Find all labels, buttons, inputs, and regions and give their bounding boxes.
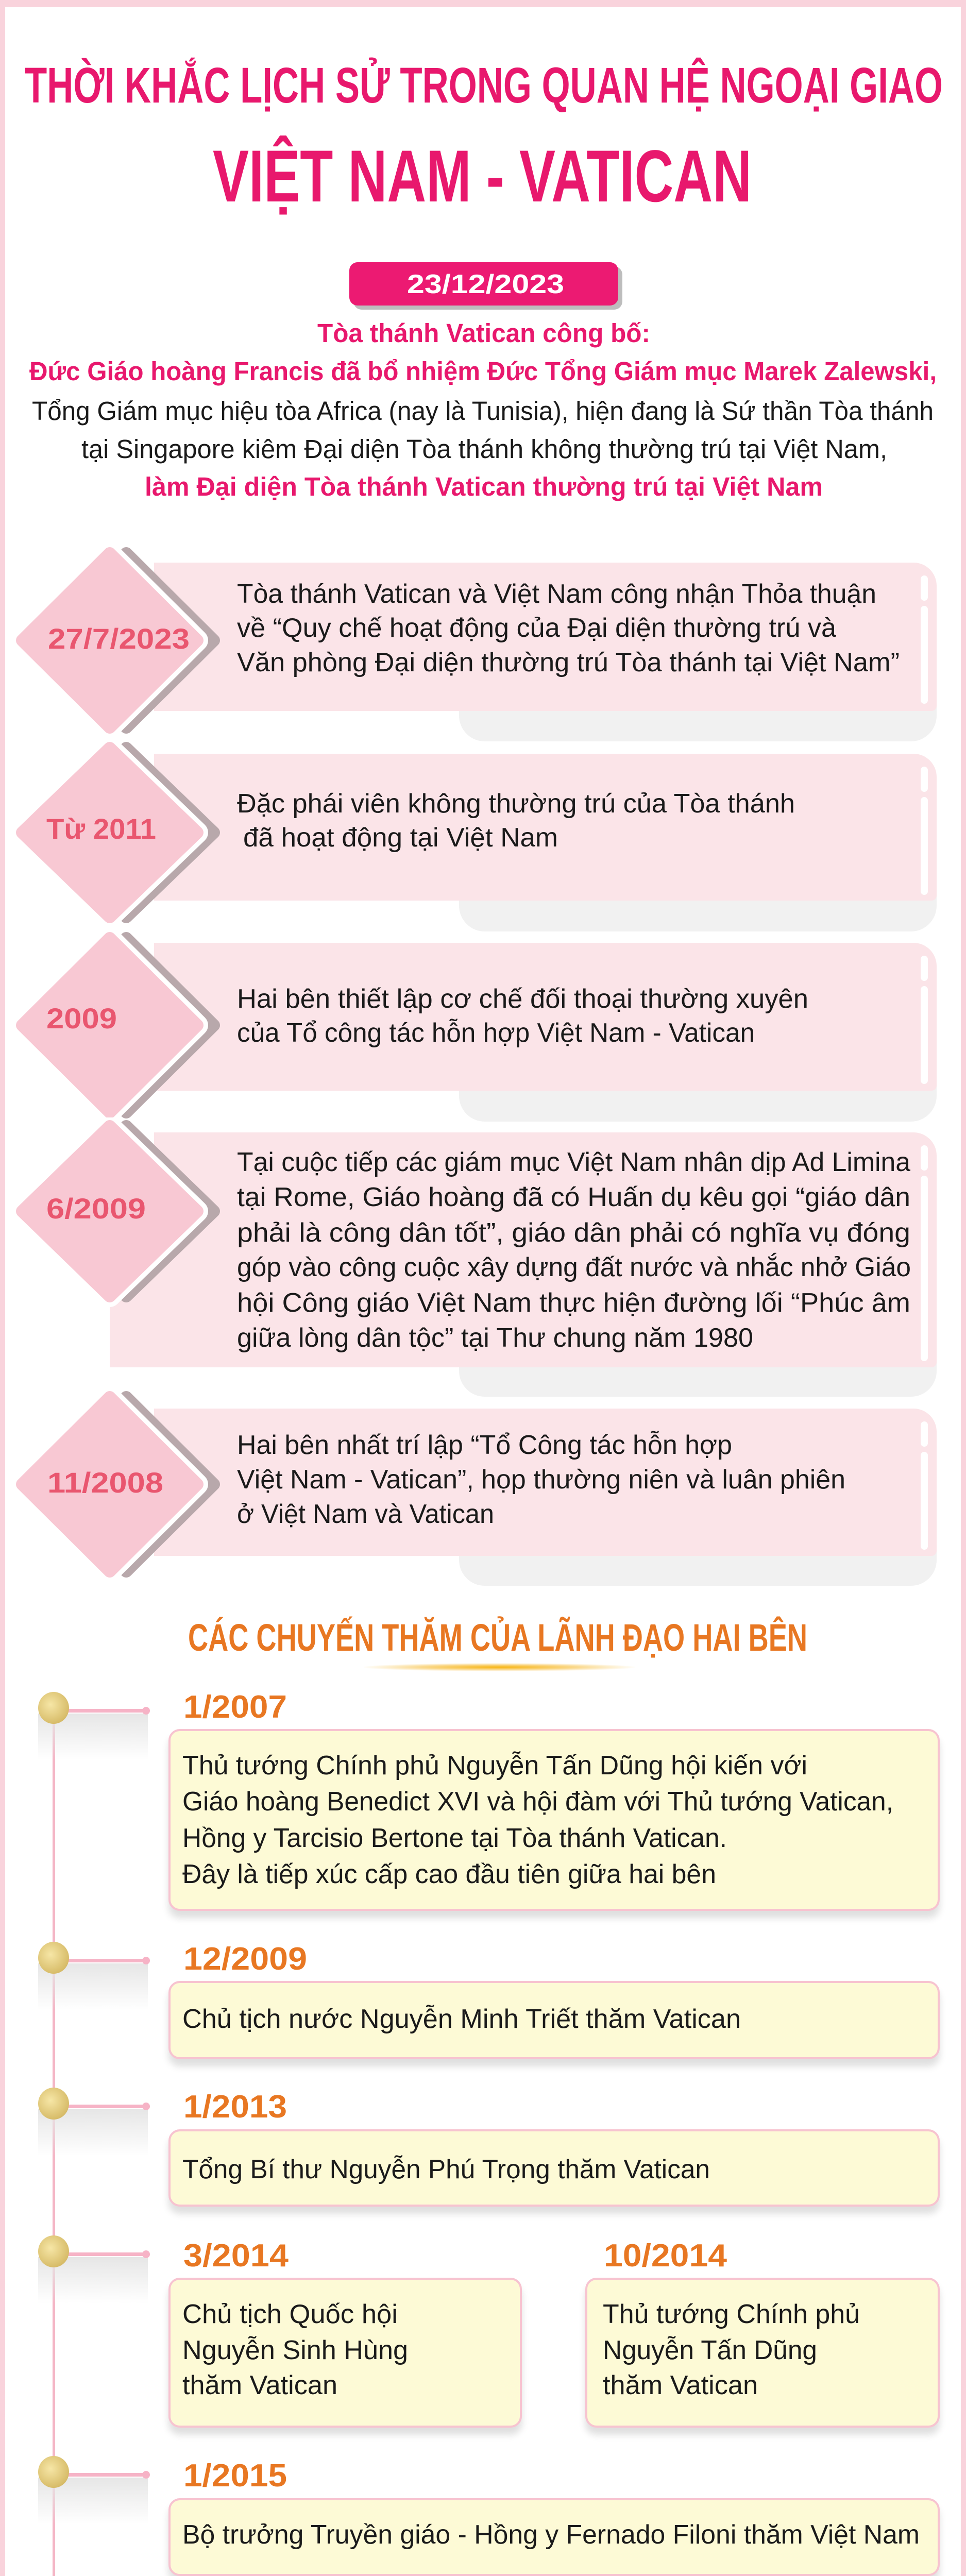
milestone: 6/2009: phải là công dân tốt”, giáo dân phải có nghĩa vụ đóng <box>237 1218 910 1248</box>
intro text: Tòa thánh Vatican công bố: <box>317 318 650 348</box>
visit: 1/2013: Tổng Bí thư Nguyễn Phú Trọng thăm Vatican <box>182 2155 710 2184</box>
milestone: 2009 <box>16 932 937 1122</box>
milestone: 2009: Hai bên thiết lập cơ chế đối thoại thường xuyên <box>237 984 808 1014</box>
visit: 12/2009 <box>38 1941 942 2069</box>
milestone: Từ 2011: đã hoạt động tại Việt Nam <box>243 823 558 853</box>
intro text: làm Đại diện Tòa thánh Vatican thường trú tại Việt Nam <box>145 472 823 501</box>
intro text <box>29 318 937 501</box>
visit: 3/2014 and 10/2014 <box>38 2235 942 2437</box>
intro text: Đức Giáo hoàng Francis đã bổ nhiệm Đức Tổng Giám mục Marek Zalewski, <box>29 357 937 386</box>
diamond: 11/2008 <box>16 1391 220 1578</box>
section heading: visits: CÁC CHUYẾN THĂM CỦA LÃNH ĐẠO HAI BÊN <box>188 1616 807 1659</box>
visit: 1/2007 <box>38 1689 942 1921</box>
visit: 3/2014 and 10/2014: thăm Vatican <box>603 2370 758 2400</box>
milestone: 11/2008 <box>16 1391 937 1586</box>
visit: 3/2014 and 10/2014: Thủ tướng Chính phủ <box>603 2299 860 2329</box>
visit: 3/2014 and 10/2014: Chủ tịch Quốc hội <box>182 2299 398 2329</box>
milestone: 6/2009: giữa lòng dân tộc” tại Thư chung năm 1980 <box>237 1323 753 1353</box>
visit: 3/2014 and 10/2014: Nguyễn Tấn Dũng <box>603 2335 817 2365</box>
visit: 1/2007: Đây là tiếp xúc cấp cao đầu tiên giữa hai bên <box>182 1859 716 1889</box>
milestone: 2009: của Tổ công tác hỗn hợp Việt Nam - Vatican <box>237 1018 755 1048</box>
diamond: 6/2009 <box>16 1117 220 1307</box>
visit: 3/2014 and 10/2014: 10/2014 <box>604 2238 727 2274</box>
milestone: 6/2009: 6/2009 <box>46 1192 146 1225</box>
title <box>25 57 943 217</box>
milestone: 27/7/2023: 27/7/2023 <box>48 622 190 655</box>
visit: 1/2015: 1/2015 <box>183 2458 287 2494</box>
visit: 1/2015 <box>38 2456 942 2576</box>
milestone: Từ 2011: Từ 2011 <box>46 812 156 845</box>
visit: 1/2007: 1/2007 <box>183 1689 287 1725</box>
milestone: 6/2009 <box>16 1117 937 1397</box>
milestone: 6/2009: hội Công giáo Việt Nam thực hiện đường lối “Phúc âm <box>237 1288 910 1318</box>
title: THỜI KHẮC LỊCH SỬ TRONG QUAN HỆ NGOẠI GIAO <box>25 57 943 113</box>
visit: 1/2007: Thủ tướng Chính phủ Nguyễn Tấn Dũng hội kiến với <box>182 1751 807 1781</box>
milestone: 11/2008: Hai bên nhất trí lập “Tổ Công tác hỗn hợp <box>237 1430 732 1460</box>
milestone: 27/7/2023: Tòa thánh Vatican và Việt Nam công nhận Thỏa thuận <box>237 579 876 609</box>
visit: 12/2009: Chủ tịch nước Nguyễn Minh Triết thăm Vatican <box>182 2004 741 2034</box>
milestone: Từ 2011 <box>16 742 937 931</box>
milestone: Từ 2011: Đặc phái viên không thường trú của Tòa thánh <box>237 789 795 819</box>
milestone: 11/2008: 11/2008 <box>47 1466 163 1499</box>
title: VIỆT NAM - VATICAN <box>213 135 752 217</box>
visit: 3/2014 and 10/2014: thăm Vatican <box>182 2370 337 2400</box>
visit: 1/2013 <box>38 2088 942 2216</box>
date badge: 23/12/2023 <box>407 269 564 299</box>
intro text: Tổng Giám mục hiệu tòa Africa (nay là Tunisia), hiện đang là Sứ thần Tòa thánh <box>32 396 934 426</box>
milestone: 11/2008: ở Việt Nam và Vatican <box>237 1499 494 1529</box>
diamond: 2009 <box>16 932 220 1118</box>
milestone: 2009: 2009 <box>46 1002 117 1035</box>
timeline vertical line <box>53 1708 55 2576</box>
diamond: Từ 2011 <box>16 742 220 923</box>
milestone: 6/2009: Tại cuộc tiếp các giám mục Việt Nam nhân dịp Ad Limina <box>237 1147 910 1177</box>
milestone: 27/7/2023: Văn phòng Đại diện thường trú Tòa thánh tại Việt Nam” <box>237 648 900 677</box>
intro text: tại Singapore kiêm Đại diện Tòa thánh không thường trú tại Việt Nam, <box>81 434 887 464</box>
visit: 1/2015: Bộ trưởng Truyền giáo - Hồng y Fernado Filoni thăm Việt Nam <box>182 2520 920 2550</box>
visit: 3/2014 and 10/2014: 3/2014 <box>183 2238 289 2274</box>
visit: 1/2013: 1/2013 <box>183 2089 287 2125</box>
milestone: 6/2009: tại Rome, Giáo hoàng đã có Huấn dụ kêu gọi “giáo dân <box>237 1182 910 1212</box>
visit: 1/2007: Hồng y Tarcisio Bertone tại Tòa thánh Vatican. <box>182 1823 727 1853</box>
date badge <box>349 262 622 310</box>
visit: 3/2014 and 10/2014: Nguyễn Sinh Hùng <box>182 2335 408 2365</box>
diamond: 27/7/2023 <box>16 547 220 734</box>
milestone: 11/2008: Việt Nam - Vatican”, họp thường niên và luân phiên <box>237 1465 845 1495</box>
visit: 1/2007: Giáo hoàng Benedict XVI và hội đàm với Thủ tướng Vatican, <box>182 1787 893 1817</box>
visit: 12/2009: 12/2009 <box>183 1941 307 1977</box>
milestone: 27/7/2023: về “Quy chế hoạt động của Đại diện thường trú và <box>237 613 836 643</box>
milestone: 6/2009: góp vào công cuộc xây dựng đất nước và nhắc nhở Giáo <box>237 1252 911 1282</box>
milestone: 27/7/2023 <box>16 547 937 741</box>
